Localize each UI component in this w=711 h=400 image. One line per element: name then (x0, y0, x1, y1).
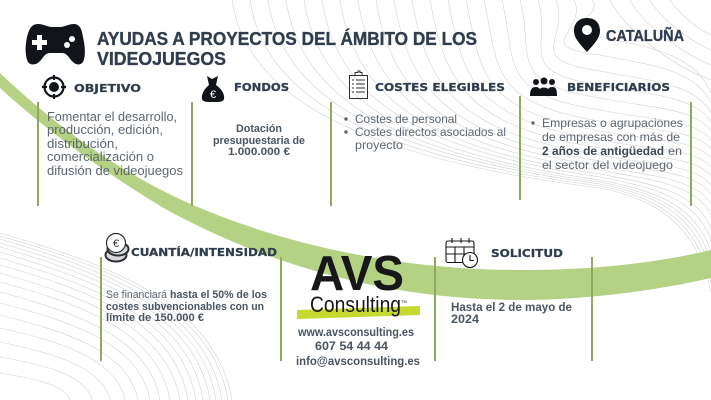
panel: cuantia (101, 234, 281, 361)
text: solicitud (451, 300, 572, 326)
text: beneficiarios: en (668, 144, 682, 158)
text: costes list (344, 112, 506, 152)
contact details: 607 54 44 44 (315, 341, 389, 353)
text: fondos (213, 123, 305, 158)
contact details (296, 327, 420, 368)
icon: coins: € (113, 238, 119, 250)
text: cuantia: límite de 150.000 € (106, 312, 204, 324)
logo: avs consulting: Consulting (310, 292, 401, 317)
icon: coins (106, 234, 128, 262)
text: solicitud: 2024 (451, 312, 479, 326)
title: VIDEOJUEGOS (97, 49, 226, 69)
text: beneficiarios: el sector del videojuego (542, 158, 673, 172)
text: fondos: Dotación (236, 123, 282, 135)
text: objetivo: producción, edición, (47, 122, 163, 137)
title (97, 28, 477, 69)
title: AYUDAS A PROYECTOS DEL ÁMBITO DE LOS (97, 28, 477, 49)
text: cuantia: hasta el 50% de los (170, 289, 267, 301)
contact details: info@avsconsulting.es (296, 356, 420, 368)
icon: people (530, 78, 557, 96)
panel: beneficiarios (520, 78, 691, 206)
text: costes list: proyecto (355, 138, 403, 152)
green swoosh band (0, 73, 711, 300)
panel: costes elegibles (331, 71, 506, 206)
icon: target (42, 75, 66, 99)
text: objetivo: comercialización o (47, 149, 154, 164)
text: costes list: Costes de personal (355, 112, 457, 126)
heading: costes elegibles: COSTES ELEGIBLES (375, 81, 505, 94)
icon: game controller (26, 24, 85, 64)
text: objetivo: difusión de videojuegos (47, 163, 183, 178)
text: beneficiarios: 2 años de antigüedad (542, 144, 664, 158)
text: beneficiarios (531, 116, 683, 172)
text: costes list: Costes directos asociados al (355, 125, 506, 139)
icon: location pin (574, 18, 600, 52)
logo: avs consulting (297, 247, 420, 319)
text: fondos: presupuestaria de (213, 135, 305, 147)
heading: beneficiarios: BENEFICIARIOS (567, 81, 670, 94)
text: cuantia: Se financiará (106, 289, 168, 301)
icon: calendar with clock (446, 238, 478, 268)
text: solicitud: Hasta el 2 de mayo de (451, 300, 572, 314)
panel: solicitud (435, 238, 592, 361)
panel: fondos (192, 76, 305, 206)
heading: objetivo: OBJETIVO (74, 82, 141, 95)
logo: avs consulting: TM (401, 299, 407, 304)
heading: fondos: FONDOS (234, 81, 289, 94)
text: beneficiarios: de empresas con más de (542, 130, 680, 144)
text: objetivo: Fomentar el desarrollo, (47, 109, 177, 124)
heading: cuantia: CUANTÍA/INTENSIDAD (131, 246, 277, 259)
text: fondos: 1.000.000 € (228, 146, 290, 158)
text: beneficiarios: Empresas o agrupaciones (542, 116, 683, 130)
logo: avs consulting: AVS (310, 247, 404, 301)
text: objetivo: distribución, (47, 136, 118, 151)
text: cuantia: costes subvencionables con un (106, 301, 264, 313)
contact details: www.avsconsulting.es (297, 327, 414, 339)
text: cuantia (106, 289, 267, 324)
text: objetivo (47, 109, 183, 178)
icon: money bag: € (210, 89, 216, 101)
icon: clipboard (350, 71, 368, 98)
region label: CATALUÑA (606, 27, 684, 45)
heading: solicitud: SOLICITUD (491, 247, 563, 260)
panel: objetivo (38, 75, 183, 206)
